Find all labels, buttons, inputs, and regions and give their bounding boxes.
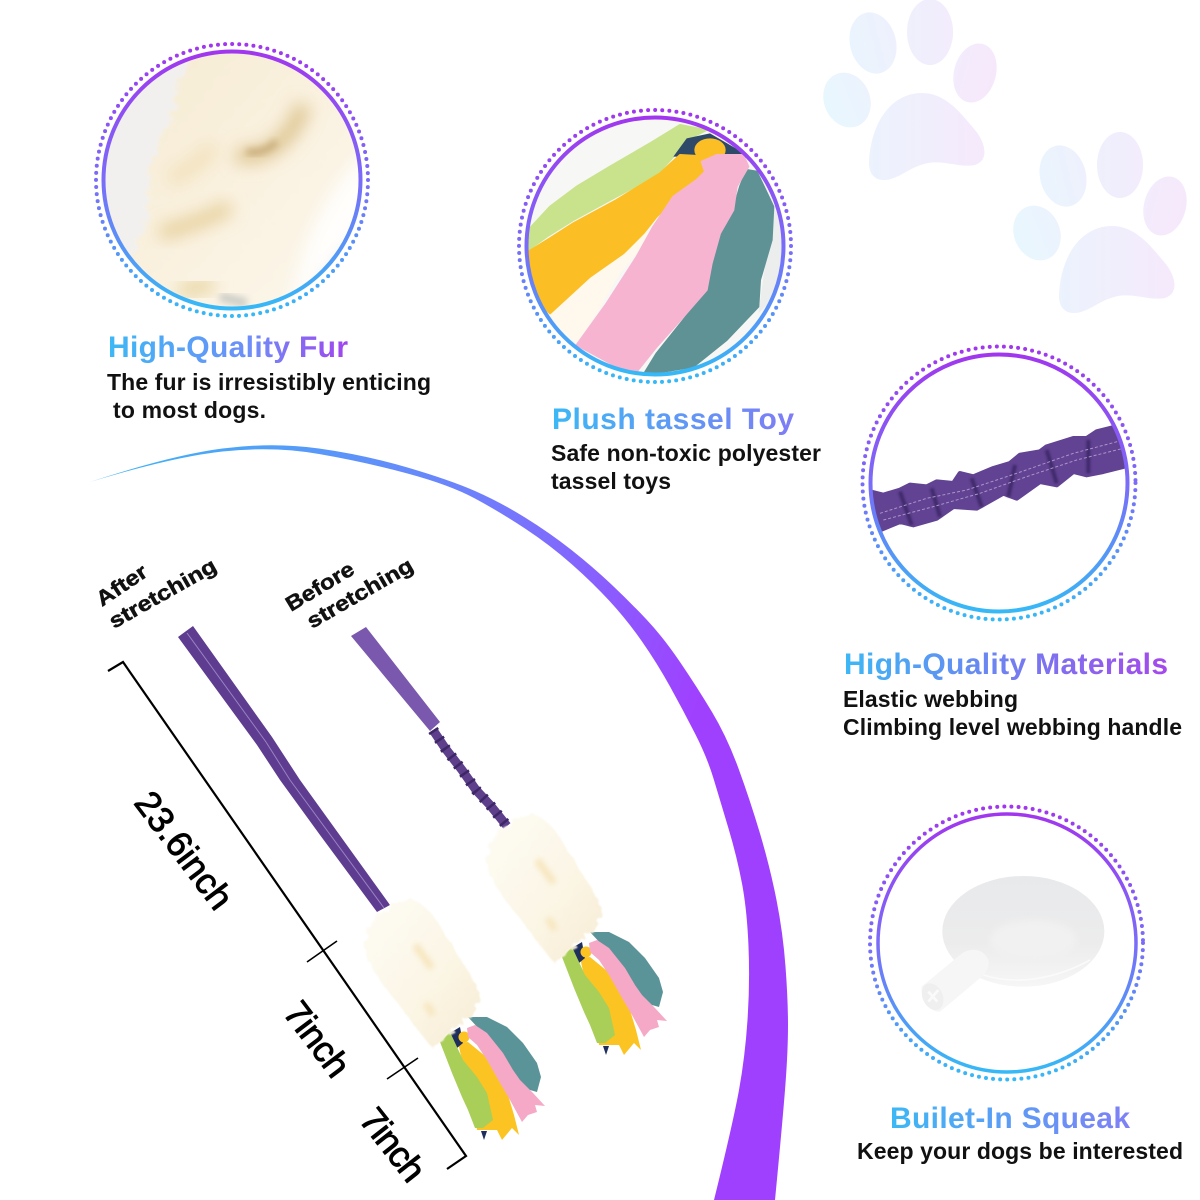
photo: fleece tassels xyxy=(528,120,782,372)
text: tassel description: Safe non-toxic polyester xyxy=(551,440,821,466)
dimension: 7inch fur: 7inch xyxy=(276,993,359,1085)
ring xyxy=(878,814,1136,1072)
label: before stretching: stretching xyxy=(302,553,417,633)
fur tube xyxy=(487,814,601,964)
panel: squeaker xyxy=(870,806,1143,1080)
ring xyxy=(104,52,360,308)
text: squeak description: Keep your dogs be interested xyxy=(857,1138,1183,1164)
label: after stretching: stretching xyxy=(105,553,220,633)
text: fur description: The fur is irresistibly enticing xyxy=(107,369,431,395)
tassels xyxy=(562,932,667,1055)
text: fur description: to most dogs. xyxy=(113,397,266,423)
dotted ring xyxy=(519,110,791,382)
icon: paw print bottom xyxy=(1005,132,1193,313)
text: fur description xyxy=(107,369,431,423)
fur tube xyxy=(365,899,479,1049)
photo: elastic webbing xyxy=(870,427,1130,530)
panel: tassel xyxy=(519,110,791,382)
label: before stretching: Before xyxy=(281,557,358,616)
dimension lines xyxy=(108,662,466,1169)
ring xyxy=(870,354,1128,612)
text: materials description: Climbing level webbing handle xyxy=(843,714,1182,740)
arc swoosh xyxy=(90,445,788,1200)
dimension: 7inch tassel: 7inch xyxy=(352,1100,434,1190)
text: materials description xyxy=(843,686,1182,740)
heading: High-Quality Fur: High-Quality Fur xyxy=(108,331,348,364)
tassels xyxy=(440,1017,545,1140)
toy: after stretching xyxy=(178,626,545,1140)
panel: fur xyxy=(96,43,373,320)
elastic gathers xyxy=(433,730,507,826)
text: tassel description: tassel toys xyxy=(551,468,671,494)
webbing handle xyxy=(351,627,440,731)
text: materials description: Elastic webbing xyxy=(843,686,1018,712)
panel: elastic webbing xyxy=(862,346,1136,620)
toy: before stretching xyxy=(351,627,667,1055)
webbing stretched xyxy=(178,626,390,912)
dotted ring xyxy=(862,346,1136,620)
dotted ring xyxy=(96,44,368,316)
webbing stitching xyxy=(187,633,384,908)
dotted ring xyxy=(870,806,1143,1080)
photo: squeaker xyxy=(918,876,1104,1014)
photo: fur close-up xyxy=(106,54,358,306)
ring xyxy=(526,118,784,374)
heading: Builet-In Squeak: Builet-In Squeak xyxy=(890,1102,1130,1135)
heading: Plush tassel Toy: Plush tassel Toy xyxy=(552,403,794,436)
label: after stretching: After xyxy=(91,559,152,611)
dimension: 23.6inch: 23.6inch xyxy=(127,783,242,917)
elastic base xyxy=(433,730,507,826)
heading: High-Quality Materials: High-Quality Materials xyxy=(844,648,1168,681)
text: tassel description xyxy=(551,440,821,494)
icon: paw print top xyxy=(815,0,1003,180)
